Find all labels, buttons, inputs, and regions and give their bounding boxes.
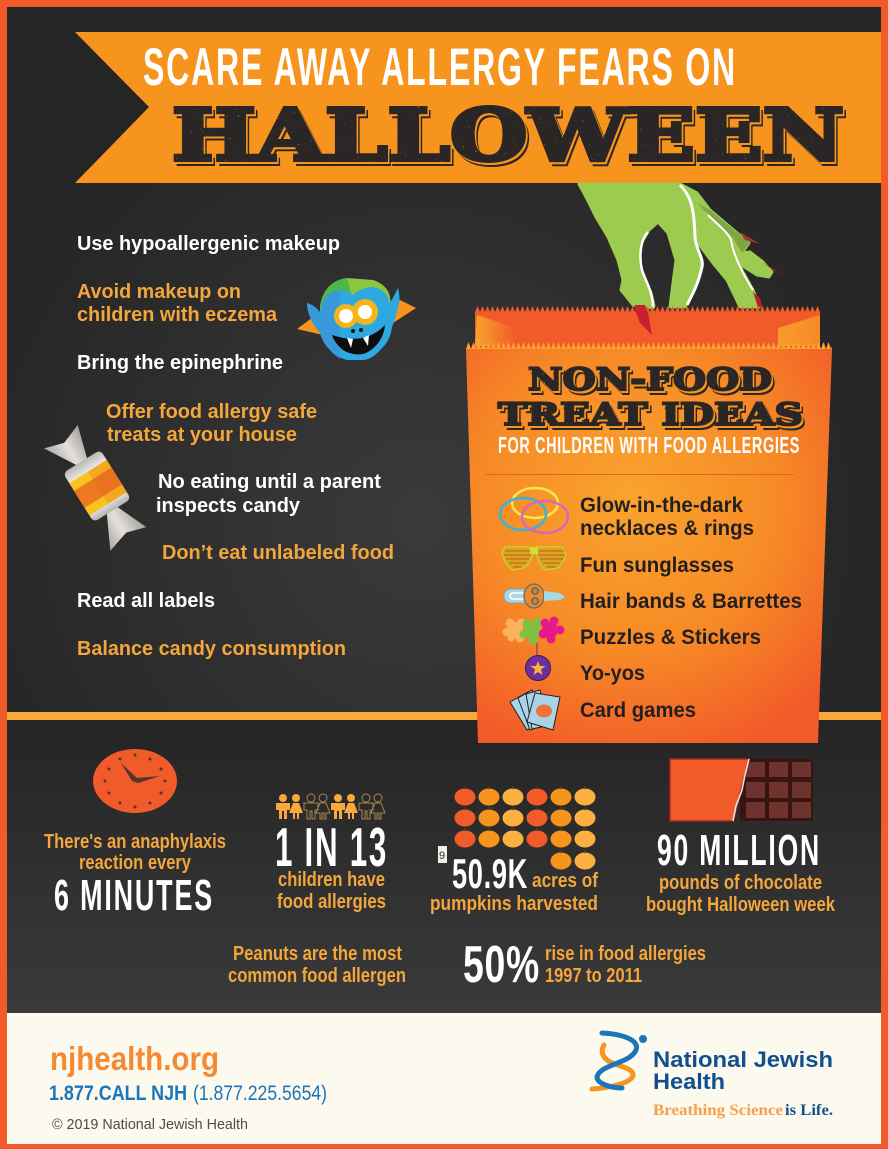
treat: yo-yo [526,643,550,680]
icon: wrapped candy [43,422,149,552]
icon: vampire [297,278,416,360]
treat: playing cards [510,690,560,730]
phone digits: (1.877.225.5654) [193,1082,327,1105]
panel: dark background stats section [7,716,881,1013]
treat: barrette [504,584,565,608]
stat text: 1 IN 13 [275,816,388,878]
stat: chocolate [646,759,836,916]
bag front panel [466,342,832,743]
treat label: barrettes: Hair bands & Barrettes [580,590,802,613]
tip: safe treats: Offer food allergy safe [106,401,317,423]
stat text: 6 MINUTES [54,871,214,920]
bag back panel [475,306,820,352]
logo tagline: is Life. [785,1102,833,1119]
logo tagline: Breathing Science [653,1102,783,1119]
stat text: children have [278,869,385,891]
stat: peanuts: Peanuts are the most [233,943,402,965]
stat text: 50.9K [452,850,528,897]
logo helix [592,1033,647,1089]
bag heading: TREAT IDEAS [498,397,803,433]
paper bag [466,305,832,743]
panel: dark background tips section [7,7,881,715]
icon: pumpkin grid [454,786,596,870]
stat text [430,850,598,915]
tip: avoid makeup: children with eczema [77,304,278,326]
stat text: pounds of chocolate [659,872,822,894]
bag heading: NON-FOOD [528,362,772,398]
tips list [77,233,394,660]
tip: unlabeled food: Don’t eat unlabeled food [162,542,394,564]
treat label: sunglasses: Fun sunglasses [580,554,734,577]
treat label: rings [580,494,754,540]
stat: anaphylaxis [44,749,226,920]
treat label: card games: Card games [580,699,696,722]
icon: chocolate bar [670,759,813,821]
tip: epinephrine: Bring the epinephrine [77,352,283,374]
treat: puzzle pieces [502,616,564,644]
stat text: food allergies [277,891,386,913]
bag heading [498,362,803,458]
tip: read labels: Read all labels [77,590,215,612]
stat: 1 in 13 [275,794,388,913]
stat text: There's an anaphylaxis [44,831,226,853]
tip: parent inspects: No eating until a parent [158,471,381,493]
stat: 50 percent rise [463,936,706,994]
stat text: reaction every [79,852,192,874]
logo wordmark [653,1047,833,1094]
stat text: acres of [532,870,598,892]
tip: safe treats [106,401,317,446]
stat: 50 percent rise: rise in food allergies [545,943,706,965]
tip: parent inspects: inspects candy [156,495,301,517]
treat: glow rings [500,488,568,533]
small footnote box: 9 [439,850,445,862]
tip: avoid makeup: Avoid makeup on [77,281,241,303]
stat text [646,826,836,916]
icon: row of children [276,794,385,819]
stat text: pumpkins harvested [430,893,598,915]
treat label: yo-yos: Yo-yos [580,662,645,685]
icon: zombie hand [579,184,782,308]
logo wordmark: Health [653,1069,725,1094]
nail on the bag [635,305,652,335]
stat text [275,816,388,913]
logo tagline [653,1102,833,1119]
logo: National Jewish Health [592,1033,833,1119]
treat: sunglasses [502,547,566,570]
stat: 50 percent rise: 1997 to 2011 [545,965,642,987]
stat: peanuts [228,943,406,987]
title banner [75,32,881,183]
treat label: rings: Glow-in-the-dark [580,494,743,517]
website: njhealth.org [50,1040,219,1077]
treat label: rings: necklaces & rings [580,517,754,540]
small footnote box [438,846,447,863]
title line two: Halloween: HALLOWEEN [172,93,844,177]
stat: 50 percent rise: 50% [463,936,540,994]
tips list: Use hypoallergenic makeup [77,233,340,255]
treat label: puzzles: Puzzles & Stickers [580,626,761,649]
icon: clock [93,749,177,813]
tip: safe treats: treats at your house [107,424,297,446]
footer panel [7,1013,881,1144]
phone: 1.877.CALL NJH [49,1082,187,1105]
stat: peanuts: common food allergen [228,965,406,987]
stat text: bought Halloween week [646,894,836,916]
copyright: © 2019 National Jewish Health [52,1116,248,1133]
orange divider stripe [7,712,881,720]
stat text [44,831,226,920]
tip: parent inspects [156,471,381,517]
stat: pumpkins [430,786,598,915]
tip: balance candy: Balance candy consumption [77,638,346,660]
tip: avoid makeup [77,281,278,326]
logo wordmark: National Jewish [653,1047,833,1072]
